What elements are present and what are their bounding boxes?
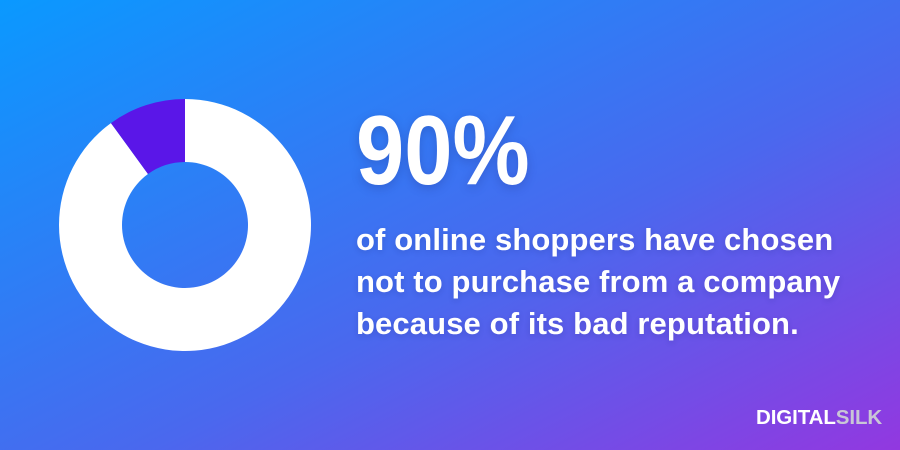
- headline statistic: 90%: 90%: [356, 95, 530, 205]
- purple segment: 10%: [111, 99, 185, 174]
- description text: because of its bad reputation.: [356, 306, 799, 341]
- description text: [356, 222, 840, 342]
- logo: Digital Silk: DIGITALSILK: [756, 406, 882, 429]
- white segment: 90%: [59, 99, 311, 351]
- description text: not to purchase from a company: [356, 264, 840, 299]
- donut chart: 90 percent: [59, 99, 311, 351]
- description text: of online shoppers have chosen: [356, 222, 833, 257]
